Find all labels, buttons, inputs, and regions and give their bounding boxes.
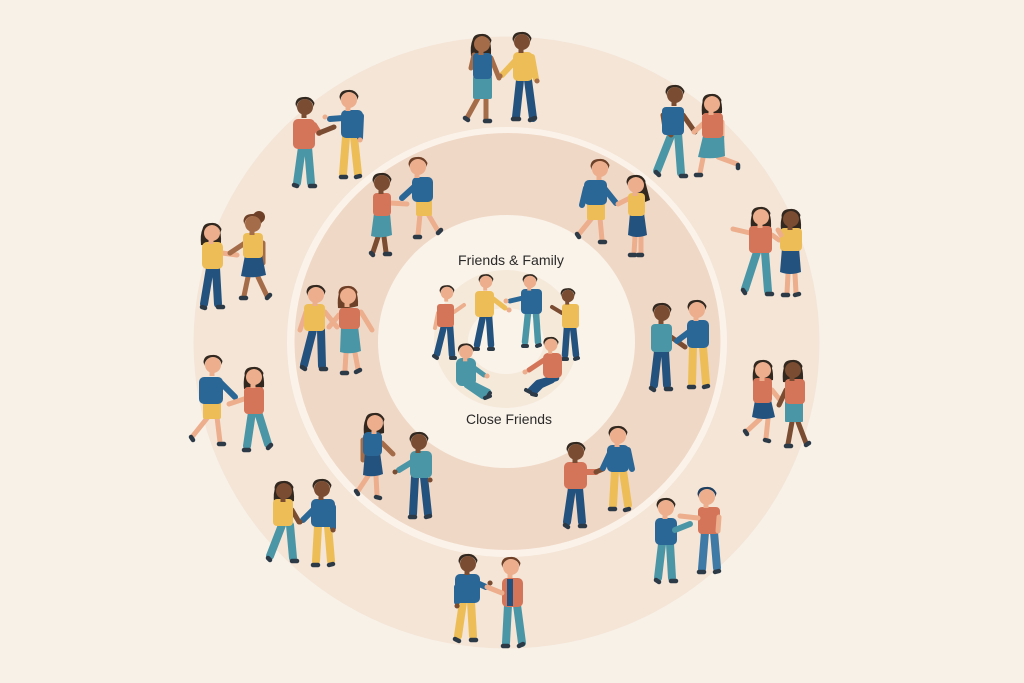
pair: bottom, two men shaking hands <box>455 554 523 646</box>
person: man in yellow shirt and navy pants <box>300 285 337 369</box>
person: man in salmon sweater and navy pants <box>564 442 603 527</box>
person: woman in yellow top and teal pants <box>268 481 299 561</box>
person: teal sweater seated <box>456 343 490 398</box>
group: close friends center circle <box>434 274 579 398</box>
label: Close Friends: Close Friends <box>466 411 552 427</box>
person: yellow sweater standing <box>475 274 509 349</box>
pair: inner upper left, woman and man <box>371 157 441 255</box>
pair: left, two women holding hands <box>201 211 270 308</box>
person: blue sweater standing <box>506 274 542 346</box>
person: woman with hair bun and navy skirt <box>230 211 270 298</box>
pair: right upper, two women talking <box>733 207 802 295</box>
label: Friends & Family: Friends & Family <box>458 252 564 268</box>
close friends ring <box>434 270 578 408</box>
person: man in blue sweater and yellow pants <box>300 479 335 565</box>
person: man in blue sweater <box>325 90 363 177</box>
pair: inner upper right, man and woman <box>577 159 650 255</box>
person: woman in salmon top and teal pants <box>733 207 779 294</box>
pair: upper left, two men shaking hands <box>293 90 363 186</box>
person: man in blue sweater and yellow shorts <box>191 355 235 444</box>
pair: inner lower left, woman and man <box>356 413 432 517</box>
person: man in yellow sweater <box>500 32 537 120</box>
person: salmon shirt standing <box>434 285 464 358</box>
person: woman in salmon top and navy skirt <box>745 360 780 441</box>
center hole <box>468 308 544 374</box>
person: man in salmon shirt and blue jeans <box>680 487 720 572</box>
person: woman in yellow top and navy skirt <box>778 209 802 295</box>
person: woman in salmon top and teal pants <box>229 367 271 450</box>
person: man in blue sweater and yellow shorts <box>577 159 616 242</box>
person: man in blue sweater and teal pants <box>655 498 690 582</box>
pair: bottom left, woman and man holding hands <box>268 479 335 565</box>
person: woman in salmon shirt and teal shorts <box>779 360 809 446</box>
person: woman in blue top <box>465 34 499 121</box>
person: woman in blue top and navy skirt <box>356 413 393 498</box>
pair: lower right, two men greeting <box>655 487 720 582</box>
pair: top, woman and man holding hands <box>465 32 537 121</box>
pair: inner right, two men shaking hands <box>651 300 709 390</box>
person: woman in salmon top and teal skirt <box>694 94 738 175</box>
person: man in salmon sweater <box>293 97 334 186</box>
middle circle: friends and family <box>294 133 720 550</box>
person: man in blue sweater and yellow pants <box>677 300 709 387</box>
pair: top right, man and woman walking <box>656 85 738 176</box>
person: yellow shirt dark skin standing <box>552 288 579 359</box>
pair: lower left, man and woman walking <box>191 355 271 450</box>
pair: inner left, man and woman <box>300 285 372 373</box>
person: woman in yellow top and navy skirt <box>618 175 650 255</box>
inner disc <box>378 215 635 468</box>
person: woman in yellow top and navy pants <box>201 223 237 308</box>
person: man in blue sweater and yellow shorts <box>402 157 441 237</box>
person: man in blue sweater and yellow pants <box>455 554 490 641</box>
person: man in teal sweater and navy pants <box>395 432 432 517</box>
person: man in blue sweater and yellow pants <box>603 426 632 510</box>
person: man in blue shirt <box>656 85 695 176</box>
pair: right lower, two women talking <box>745 360 809 446</box>
person: salmon sweater seated <box>525 337 562 395</box>
outer circle: wider community <box>194 36 820 648</box>
pair: inner lower right, two men shaking hands <box>564 426 632 527</box>
person: man in teal shirt and navy pants <box>651 303 685 390</box>
white ring separator <box>287 127 727 557</box>
person: woman in salmon top and teal skirt <box>371 173 407 255</box>
person: man in salmon jacket and teal pants <box>487 557 523 646</box>
person: woman in salmon top and teal skirt <box>329 286 372 373</box>
